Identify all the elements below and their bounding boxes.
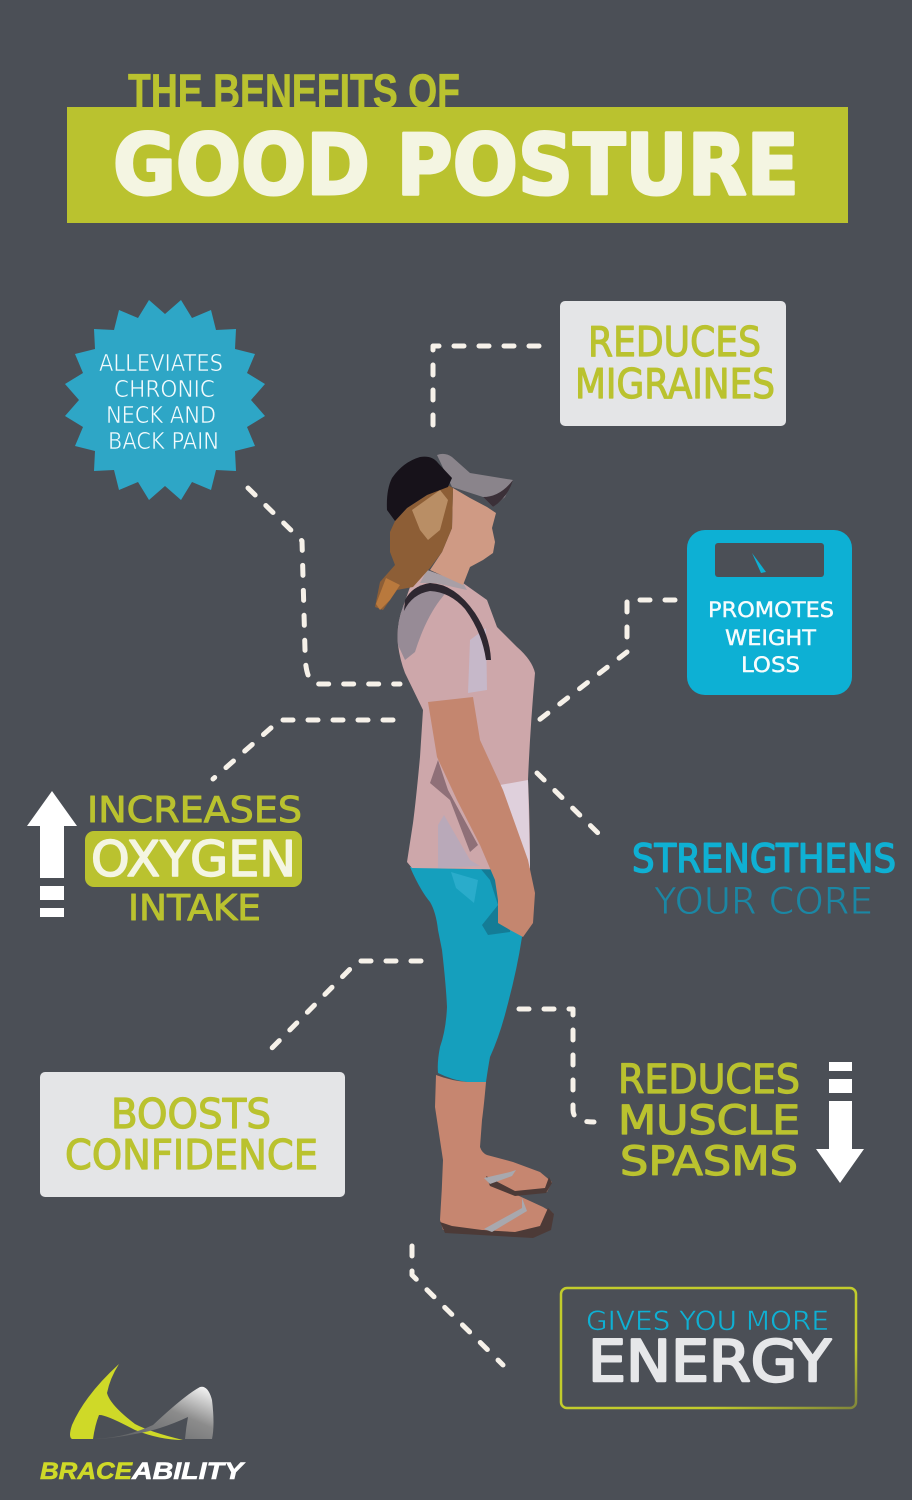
- figure cap: [387, 454, 513, 521]
- starburst: alleviates chronic neck and back pain: CHRONIC: [114, 377, 215, 403]
- text: reduces muscle spasms: [618, 1057, 800, 1185]
- title: the benefits of: THE BENEFITS OF: [128, 64, 460, 117]
- figure arm and hand: [428, 697, 535, 937]
- text: strengthens your core: [632, 837, 896, 923]
- logo: braceability: [40, 1364, 245, 1485]
- text: increases oxygen intake: INCREASES: [87, 790, 302, 831]
- starburst: alleviates chronic neck and back pain: [65, 300, 265, 500]
- text: reduces muscle spasms: REDUCES: [618, 1057, 800, 1103]
- text: strengthens your core: YOUR CORE: [653, 880, 873, 923]
- icon: up arrow: [27, 791, 77, 917]
- figure neck and face: [430, 488, 496, 585]
- text: increases oxygen intake: INTAKE: [128, 888, 261, 929]
- figure lower legs and feet: [435, 1075, 554, 1238]
- text: increases oxygen intake: [85, 790, 302, 929]
- panel: gives you more energy: ENERGY: [588, 1329, 831, 1395]
- starburst: alleviates chronic neck and back pain: NECK AND: [106, 403, 216, 429]
- panel: reduces migraines: [560, 301, 786, 426]
- text: increases oxygen intake: OXYGEN: [91, 831, 296, 888]
- panel: boosts confidence: [40, 1072, 345, 1197]
- starburst: alleviates chronic neck and back pain: ALLEVIATES: [99, 351, 223, 377]
- panel: gives you more energy: [561, 1288, 856, 1408]
- figure hair: [375, 482, 453, 610]
- logo: braceability: BRACE: [40, 1458, 133, 1485]
- figure: woman standing with good posture: [375, 454, 554, 1238]
- title banner: GOOD POSTURE: [113, 116, 799, 214]
- panel: promotes weight loss scale: [687, 530, 852, 695]
- panel: reduces migraines: MIGRAINES: [575, 360, 775, 408]
- panel: boosts confidence: CONFIDENCE: [65, 1131, 318, 1179]
- dashed connector lines: [213, 346, 675, 1365]
- panel: promotes weight loss scale: WEIGHT: [725, 626, 816, 650]
- text: reduces muscle spasms: MUSCLE: [618, 1098, 800, 1144]
- panel: reduces migraines: REDUCES: [588, 318, 761, 366]
- panel: gives you more energy: GIVES YOU MORE: [586, 1306, 829, 1337]
- panel: promotes weight loss scale: PROMOTES: [708, 598, 834, 622]
- panel: promotes weight loss scale: LOSS: [741, 653, 800, 677]
- panel: boosts confidence: BOOSTS: [111, 1090, 271, 1138]
- icon: down arrow: [816, 1062, 864, 1183]
- text: reduces muscle spasms: SPASMS: [620, 1139, 798, 1185]
- logo: braceability: ABILITY: [131, 1458, 245, 1485]
- starburst: alleviates chronic neck and back pain: BACK PAIN: [108, 429, 219, 455]
- figure shirt: [398, 570, 535, 870]
- figure legs: teal capris: [410, 867, 522, 1082]
